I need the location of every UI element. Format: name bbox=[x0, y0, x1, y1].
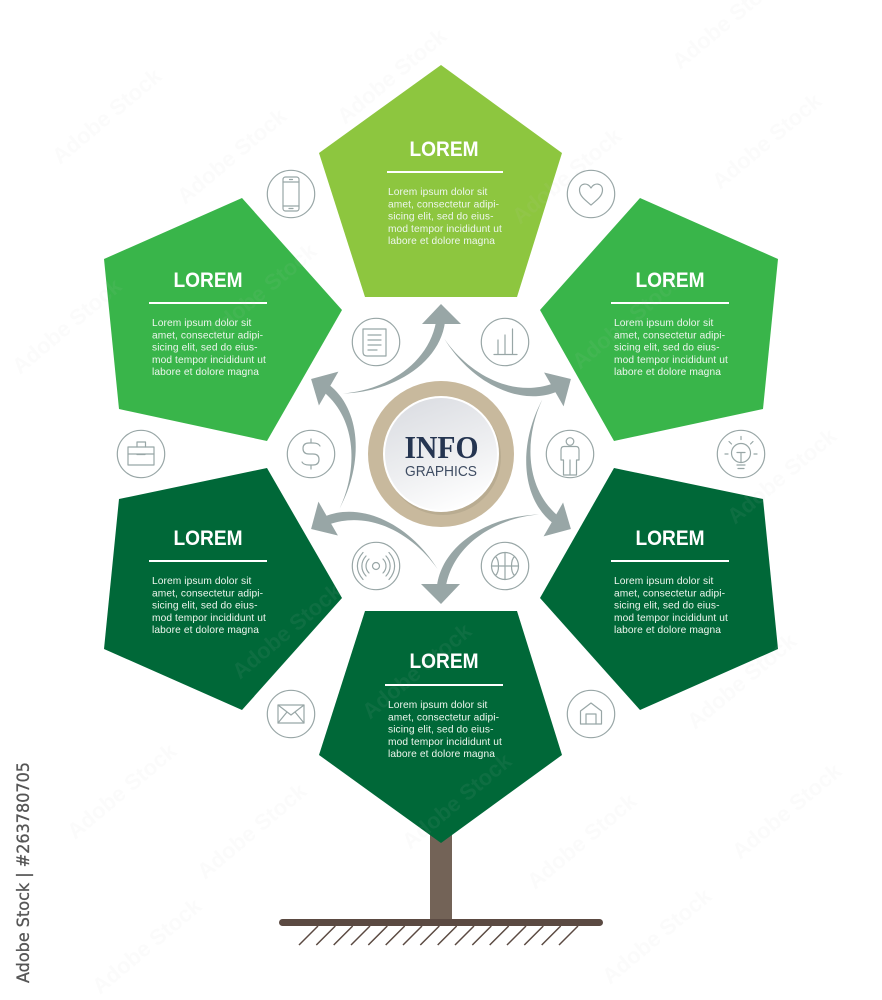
heading: LOREM bbox=[636, 269, 704, 292]
icon: heart bbox=[567, 170, 615, 218]
arrow: to upper left bbox=[262, 362, 399, 509]
heading: LOREM bbox=[636, 527, 704, 550]
watermark: Adobe Stock pattern: Adobe Stock bbox=[727, 758, 847, 864]
watermark: Adobe Stock pattern: Adobe Stock bbox=[47, 63, 167, 169]
text block: mod tempor incididunt ut bbox=[614, 613, 728, 624]
text block: amet, consectetur adipi- bbox=[388, 712, 499, 724]
watermark: Adobe Stock pattern: Adobe Stock bbox=[397, 748, 517, 854]
panel: bottom dark green bbox=[319, 611, 562, 843]
heading: LOREM bbox=[174, 269, 242, 292]
text block: Lorem ipsum dolor sit bbox=[152, 318, 252, 329]
text block: sicing elit, sed do eius- bbox=[152, 342, 258, 354]
text block: Lorem ipsum dolor sit bbox=[614, 318, 714, 329]
icon: dollar bbox=[287, 430, 335, 478]
heading: LOREM bbox=[410, 650, 478, 673]
divider bbox=[149, 302, 267, 304]
centre badge bbox=[368, 381, 514, 527]
text block: sicing elit, sed do eius- bbox=[614, 600, 720, 612]
icon: phone bbox=[267, 170, 315, 218]
arrow: to lower right bbox=[483, 399, 620, 546]
watermark: Adobe Stock pattern: Adobe Stock bbox=[62, 738, 182, 844]
arrow: to top bbox=[343, 304, 461, 394]
arrow: to lower left bbox=[301, 467, 438, 614]
watermark: Adobe Stock pattern: Adobe Stock bbox=[707, 88, 827, 194]
divider bbox=[611, 302, 729, 304]
panel: lower left dark green bbox=[104, 468, 342, 710]
text block: sicing elit, sed do eius- bbox=[152, 600, 258, 612]
text block: mod tempor incididunt ut bbox=[388, 224, 502, 235]
watermark: Adobe Stock pattern: Adobe Stock bbox=[722, 423, 842, 529]
divider bbox=[611, 560, 729, 562]
text block: amet, consectetur adipi- bbox=[388, 200, 499, 210]
icon: document bbox=[352, 318, 400, 366]
watermark: Adobe Stock pattern: Adobe Stock bbox=[202, 238, 322, 344]
text block: amet, consectetur adipi- bbox=[152, 330, 263, 342]
divider bbox=[387, 171, 503, 173]
ground with hatching bbox=[279, 919, 603, 945]
watermark: Adobe Stock pattern: Adobe Stock bbox=[507, 123, 627, 229]
watermark: Adobe Stock pattern: Adobe Stock bbox=[192, 778, 312, 884]
icon: person bbox=[546, 430, 594, 478]
text block: labore et dolore magna bbox=[388, 236, 495, 247]
panel: upper left green bbox=[104, 198, 342, 441]
watermark: Adobe Stock pattern: Adobe Stock bbox=[87, 893, 207, 999]
GRAPHICS wordmark: GRAPHICS bbox=[405, 463, 477, 480]
watermark: Adobe Stock pattern: Adobe Stock bbox=[332, 23, 452, 129]
text block: mod tempor incididunt ut bbox=[152, 355, 266, 366]
heading: LOREM bbox=[174, 527, 242, 550]
text block: amet, consectetur adipi- bbox=[152, 588, 263, 600]
text block: Lorem ipsum dolor sit bbox=[614, 576, 714, 587]
text block: sicing elit, sed do eius- bbox=[388, 212, 494, 222]
text block: sicing elit, sed do eius- bbox=[614, 342, 720, 354]
tree trunk bbox=[430, 830, 452, 922]
text block: mod tempor incididunt ut bbox=[388, 737, 502, 748]
text block: labore et dolore magna bbox=[152, 367, 259, 378]
watermark: Adobe Stock pattern: Adobe Stock bbox=[597, 883, 717, 989]
text block: labore et dolore magna bbox=[614, 367, 721, 378]
text block: mod tempor incididunt ut bbox=[614, 355, 728, 366]
text block: Lorem ipsum dolor sit bbox=[388, 700, 488, 711]
icon: house bbox=[567, 690, 615, 738]
watermark: Adobe Stock pattern: Adobe Stock bbox=[522, 788, 642, 894]
text block: amet, consectetur adipi- bbox=[614, 330, 725, 342]
heading: LOREM bbox=[410, 138, 478, 161]
panel: top light green bbox=[319, 65, 562, 297]
watermark: Adobe Stock pattern: Adobe Stock bbox=[227, 578, 347, 684]
arrow: to bottom bbox=[421, 514, 539, 604]
watermark: Adobe Stock pattern: Adobe Stock bbox=[682, 628, 802, 734]
watermark: Adobe Stock pattern: Adobe Stock bbox=[7, 273, 127, 379]
divider bbox=[385, 684, 503, 686]
icon: envelope bbox=[267, 690, 315, 738]
text block: labore et dolore magna bbox=[388, 749, 495, 760]
watermark: Adobe Stock pattern: Adobe Stock bbox=[567, 268, 687, 374]
icon: briefcase bbox=[117, 430, 165, 478]
text block: labore et dolore magna bbox=[614, 625, 721, 636]
panel: lower right dark green bbox=[540, 468, 778, 710]
text block: sicing elit, sed do eius- bbox=[388, 724, 494, 736]
divider bbox=[149, 560, 267, 562]
icon: bar chart bbox=[481, 318, 529, 366]
text block: Lorem ipsum dolor sit bbox=[152, 576, 252, 587]
watermark: Adobe Stock pattern: Adobe Stock bbox=[172, 103, 292, 209]
icon: basketball bbox=[481, 542, 529, 590]
text block: labore et dolore magna bbox=[152, 625, 259, 636]
INFO wordmark: INFO bbox=[404, 429, 478, 465]
arrow: to upper right bbox=[444, 294, 581, 441]
icon: light bulb bbox=[717, 430, 765, 478]
watermark: Adobe Stock pattern: Adobe Stock bbox=[357, 618, 477, 724]
icon: wireless signal bbox=[352, 542, 400, 590]
stock id label: Adobe Stock | #263780705 bbox=[14, 762, 34, 983]
text block: Lorem ipsum dolor sit bbox=[388, 187, 488, 198]
panel: upper right green bbox=[540, 198, 778, 441]
text block: mod tempor incididunt ut bbox=[152, 613, 266, 624]
text block: amet, consectetur adipi- bbox=[614, 588, 725, 600]
